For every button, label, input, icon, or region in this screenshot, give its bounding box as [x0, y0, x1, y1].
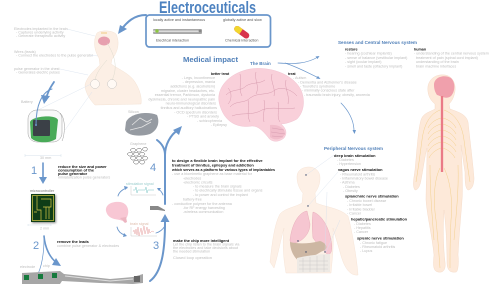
scale: 30 mm [25, 154, 61, 160]
text: reduce size: reduce the size and power [58, 164, 107, 169]
text: intelligent chip [173, 238, 240, 260]
step number 3: 3 [153, 240, 159, 252]
text: pulse generator label: - Generates electric pulses [16, 70, 60, 74]
arrow: step 2 [38, 236, 61, 274]
text: splanchnic nerve stimulation: - Chronic bowel disease [347, 199, 386, 203]
text: restore list: restore [345, 48, 358, 52]
text: splenic nerve stimulation: splenic nerve stimulation [357, 236, 404, 240]
text: pulse generator label: pulse generator in the chest [14, 67, 60, 71]
text: hepatic pancreatic stimulation: - Hepatitis [354, 226, 371, 230]
text: intelligent chip: Let the chip listen to the brain signals via [173, 242, 240, 246]
text: better treat list: addictions (e.g. alcoholism) [170, 84, 215, 88]
text: wires label [14, 50, 94, 58]
heading: senses and central nervous system: Senses and Central Nervous system [338, 40, 417, 45]
text: better treat list: - Epilepsy [211, 123, 227, 127]
text: battery label: Battery [21, 100, 33, 104]
text: better treat list: essential tremor, Parkinson, dystonia [155, 93, 216, 97]
text: remove leads: combine pulse generator & electrodes [57, 244, 119, 248]
text: restore list [345, 48, 407, 68]
text: pulse generator label [14, 67, 60, 74]
text: intelligent chip: the electrodes and take decisions about [173, 246, 238, 250]
text: deep brain stimulation: deep brain stimulation [334, 153, 376, 158]
image: pulse generator device [28, 110, 64, 142]
text: splanchnic nerve stimulation: - Irritable bowel [347, 203, 372, 207]
text: chemical interaction: Chemical interaction [225, 38, 258, 42]
text: reduce size: pulse generator [58, 171, 88, 176]
text: vagus nerve stimulation: - Inflammatory bowel disease [340, 176, 388, 180]
heading: medical impact: Medical impact [183, 55, 239, 64]
scale: 2 mm [28, 224, 51, 230]
text: treat list: treat [288, 72, 296, 76]
text: better treat list: - PTSD and anxiety [187, 114, 219, 118]
text: vagus nerve stimulation: vagus nerve stimulation [338, 167, 383, 172]
text: vagus nerve stimulation: - Rheumatoid arthritis [340, 172, 375, 176]
text: treat list: - Dementia and Alzheimer's disease [298, 80, 357, 84]
image: microcontroller chip [31, 194, 56, 223]
text: restore list: - hearing (cochlear implants) [345, 52, 392, 56]
text: better treat list: neuro-immunological disorders [166, 102, 216, 106]
text: reduce size [58, 164, 110, 180]
text: deep brain stimulation: - Diabetes [337, 158, 354, 162]
text: remove leads: remove the leads [57, 239, 89, 244]
figure: full body nervous system [413, 75, 474, 272]
text: human list [414, 48, 489, 68]
text: hepatic pancreatic stimulation [351, 216, 408, 234]
image: large brain [219, 68, 304, 141]
text: human list: - understanding of the central nervous system [414, 52, 489, 56]
text: electrodes label: - Captures underlying activity [16, 30, 64, 34]
text: electrodes label [14, 27, 68, 38]
text: hepatic pancreatic stimulation: - Diabetes [354, 222, 371, 226]
text: restore list: - sense of balance (vestibular implant) [345, 56, 407, 60]
text: better treat list: - OCD spectrum disorders [174, 110, 217, 114]
heading: the brain: The Brain [250, 61, 271, 66]
text: design flexible implant: to design a flexible brain implant for the effective [172, 158, 263, 163]
text: human list: human [414, 48, 427, 52]
text: better treat list: - Legs, Incontinence [182, 76, 215, 80]
text: treat list: - Autism [293, 76, 306, 80]
text: splanchnic nerve stimulation: splanchnic nerve stimulation [345, 194, 399, 198]
text: deep brain stimulation [334, 153, 376, 166]
icon: pill [234, 26, 249, 39]
text: design flexible implant: - to electrically stimulate tissue and organs [193, 188, 263, 192]
text: design flexible implant: -wireless communication [183, 210, 223, 214]
text: locally active: locally active and instantaneous [153, 18, 205, 22]
text: splenic nerve stimulation: - Chronic fatigue [360, 241, 387, 245]
step number 1: 1 [31, 165, 37, 177]
text: human list: treatment of pain (spinal cord implant) [416, 56, 478, 60]
step number 2: 2 [33, 240, 39, 252]
figure: head and chest with implant [85, 31, 141, 105]
leader lines: stimulation sites [297, 155, 340, 253]
text: design flexible implant: - to power and control the implant [193, 193, 248, 197]
text: splanchnic nerve stimulation: - Cancer [347, 212, 362, 216]
text: better treat list: - schizophrenia [197, 119, 223, 123]
text: deep brain stimulation: - Hypertension [337, 162, 361, 166]
arrow: step 4 branching [157, 126, 182, 204]
image: implant stub [150, 206, 165, 211]
text: design flexible implant: - conductive polymer for the antenna [172, 202, 233, 206]
text: better treat list [148, 72, 230, 127]
text: electrode and chip labels: electrode [20, 265, 35, 269]
text: restore list: - smell and taste (olfactory implant) [345, 64, 402, 68]
scale: 2 mm: 2 mm [40, 226, 49, 230]
image: flexible implant [22, 271, 143, 284]
text: design flexible implant [171, 158, 275, 214]
arrow: box to head [118, 15, 146, 34]
text: splanchnic nerve stimulation [345, 194, 399, 216]
text: stimulation signal: stimulation signal [126, 182, 154, 186]
text: design flexible implant: battery-free [183, 198, 202, 202]
text: hepatic pancreatic stimulation: hepatic/pancreatic stimulation [351, 216, 408, 222]
image: small brain [106, 202, 128, 223]
text: design flexible implant: - to measure the brain signals [193, 184, 242, 188]
panel: electrical vs chemical interaction [146, 15, 270, 47]
text: electrode and chip labels [20, 264, 50, 269]
text: splenic nerve stimulation [357, 236, 404, 253]
text: reduce size: consumption of the [58, 168, 95, 172]
arrows: closed loop [117, 186, 165, 237]
text: human list: understanding of the brain [416, 60, 459, 64]
text: reduce size: miniaturization pulse generators [58, 176, 110, 180]
text: intelligent chip: Closed loop operation [173, 255, 212, 260]
text: intelligent chip: make the chip more intelligent [173, 238, 230, 243]
image: graphene lattice: Graphene [130, 142, 146, 146]
heading: peripheral nervous system: Peripheral Nervous system [324, 146, 383, 151]
text: splanchnic nerve stimulation: - Irritable bladder [347, 208, 376, 212]
arrow: battery callout [35, 82, 54, 126]
text: vagus nerve stimulation: - Diabetes [343, 185, 360, 189]
arrows: brain branches [278, 56, 320, 79]
text: vagus nerve stimulation: - Asthma [340, 180, 355, 184]
text: vagus nerve stimulation [338, 167, 388, 193]
text: splenic nerve stimulation: - Lupus [360, 249, 372, 253]
image: graphene lattice [127, 142, 148, 164]
arrow: step 3 [150, 214, 170, 281]
text: hepatic pancreatic stimulation: - Cancer [354, 230, 369, 234]
scale: 30 mm: 30 mm [40, 156, 51, 160]
step number 4: 4 [150, 162, 156, 174]
image: silicon chip: Silicon [128, 110, 139, 114]
text: treat list: - traumatic brain injury, obesity, anorexia [304, 93, 371, 97]
text: wires label: - Connect the electrodes to the pulse generator [16, 54, 94, 58]
text: design flexible implant: -for RF energy harvesting [183, 206, 225, 210]
arrow: step 1 [39, 163, 47, 184]
text: restore list: - sight (ocular implant) [345, 60, 381, 64]
text: wires label: Wires (leads) [14, 50, 36, 54]
image: silicon chip [125, 110, 158, 136]
text: better treat list: migraine, cluster headaches, etc. [161, 89, 215, 93]
text: human list: brain machine interfaces [416, 64, 456, 68]
text: design flexible implant: -electrodes [183, 176, 201, 180]
text: design flexible implant: - use a biomimetic graphene as base material for [172, 172, 253, 176]
text: electrodes label: Electrodes implanted in the brain [14, 27, 68, 31]
text: better treat list: tinnitus and auditory hallucinations [161, 106, 217, 110]
text: design flexible implant: treatment of tinnitus, epilepsy and addiction [172, 162, 254, 168]
text: brain signal [130, 222, 157, 236]
text: design flexible implant: which serves as a platform for various types of implantables [171, 167, 275, 172]
text: vagus nerve stimulation: - Obesity [343, 189, 358, 193]
text: microcontroller label: microcontroller [30, 189, 55, 193]
text: treat list: - Tourette's syndrome [300, 84, 335, 88]
text: splenic nerve stimulation: - Rheumatoid arthritis [360, 245, 395, 249]
text: stimulation signal [126, 182, 156, 195]
text: electrical interaction: Electrical interaction [156, 38, 189, 42]
text: globally active: globally active and slow [223, 18, 262, 22]
text: better treat list: dyskinesia, chronic and neuropathic pain [148, 98, 215, 102]
icon: electrode strip [153, 29, 202, 34]
text: electrode and chip labels: chip [43, 264, 50, 268]
text: design flexible implant: -electronic circuits [183, 180, 213, 184]
text: remove leads [57, 239, 119, 248]
text: better treat list: - depression, mania [183, 80, 216, 84]
text: treat list [288, 72, 371, 97]
text: electrodes label: - Generate therapeutic activity [16, 34, 65, 38]
text: better treat list: better treat [211, 72, 230, 76]
figure: torso with organs [270, 167, 358, 275]
text: treat list: - minimally conscious state after [302, 88, 355, 92]
text: brain signal: brain signal [130, 222, 149, 226]
text: intelligent chip: the needed stimulation [173, 250, 210, 254]
arrow: to peripheral nervous system [341, 103, 356, 134]
